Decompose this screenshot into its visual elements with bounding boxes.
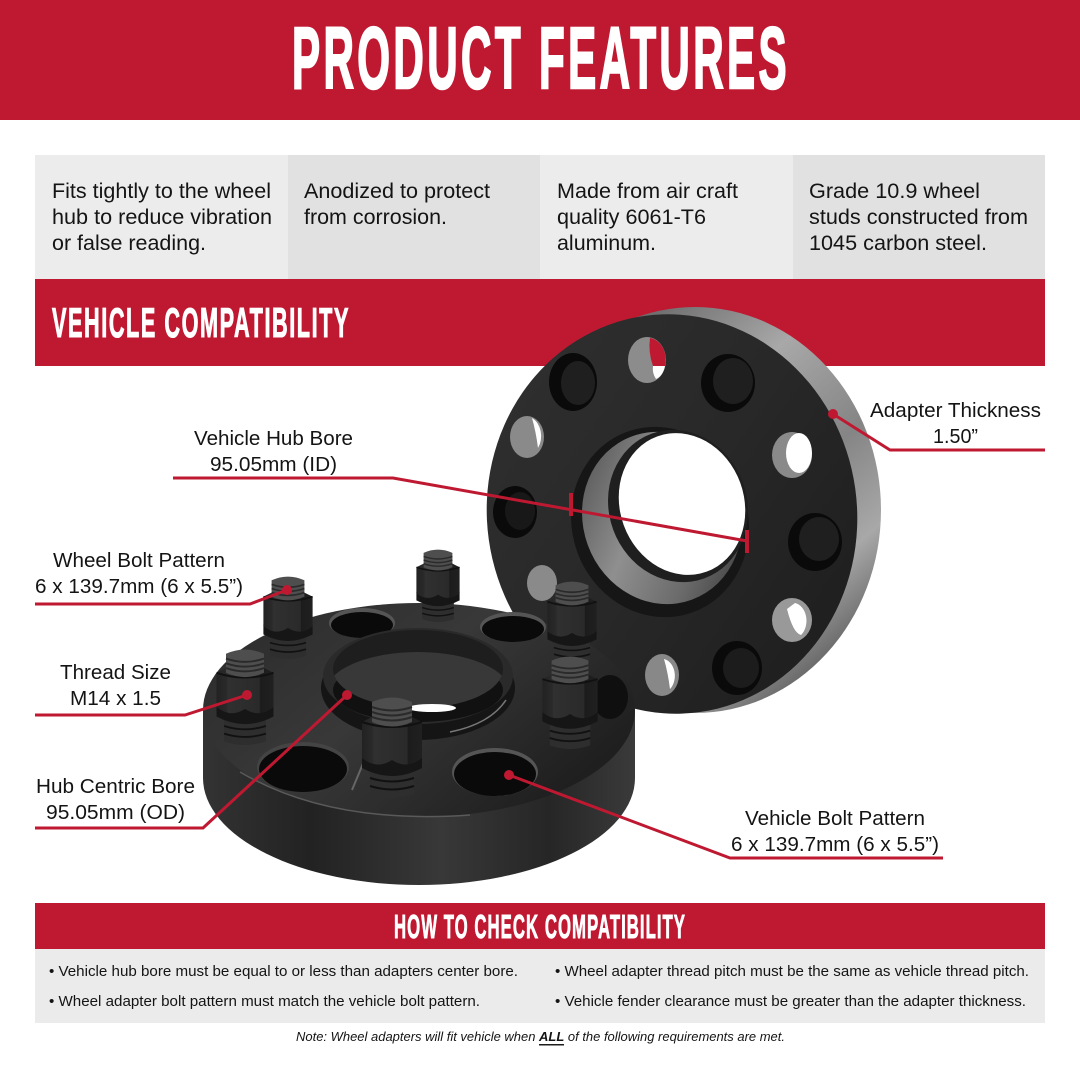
vehicle compatibility band: VEHICLE COMPATIBILITY bbox=[52, 299, 350, 346]
panel: feature cards: Made from air craft bbox=[557, 180, 738, 203]
callout: hub centric bore: Hub Centric Bore bbox=[36, 776, 195, 798]
panel: feature cards: quality 6061-T6 bbox=[557, 206, 706, 229]
panel: feature cards: aluminum. bbox=[557, 232, 656, 255]
panel: feature cards bbox=[35, 155, 1045, 279]
callout: thread size: M14 x 1.5 bbox=[70, 688, 161, 710]
panel: feature cards: Fits tightly to the wheel bbox=[52, 180, 271, 203]
panel: feature cards: hub to reduce vibration bbox=[52, 206, 272, 229]
bolt holes bbox=[257, 608, 628, 796]
panel: feature cards: studs constructed from bbox=[809, 206, 1028, 229]
callout: vehicle hub bore: Vehicle Hub Bore bbox=[194, 428, 353, 450]
raised hub ring bbox=[544, 402, 776, 642]
callout: vehicle bolt pattern: 6 x 139.7mm (6 x 5.5”) bbox=[731, 834, 939, 856]
callout: vehicle bolt pattern: Vehicle Bolt Pattern bbox=[745, 808, 925, 830]
panel: how to check compatibility: • Vehicle hub bore must be equal to or less than adapters center bore. bbox=[49, 964, 518, 980]
panel: feature cards: or false reading. bbox=[52, 232, 206, 255]
callout: wheel bolt pattern: 6 x 139.7mm (6 x 5.5”) bbox=[35, 576, 243, 598]
panel: feature cards: Anodized to protect bbox=[304, 180, 490, 203]
note: Note: Wheel adapters will fit vehicle when ALL of the following requirements are met. bbox=[296, 1030, 785, 1044]
wheel studs bbox=[216, 550, 598, 798]
panel: feature cards: Grade 10.9 wheel bbox=[809, 180, 980, 203]
product photo: flat wheel adapter with studs bbox=[203, 550, 635, 885]
product photo: upright wheel adapter bbox=[461, 290, 883, 738]
title banner bbox=[0, 0, 1080, 120]
adapter body bbox=[203, 603, 635, 885]
panel: how to check compatibility: • Vehicle fender clearance must be greater than the adapter thickness. bbox=[555, 994, 1026, 1010]
callout: vehicle hub bore bbox=[173, 428, 747, 553]
panel: feature cards: from corrosion. bbox=[304, 206, 447, 229]
panel: how to check compatibility: • Wheel adapter bolt pattern must match the vehicle bolt pattern. bbox=[49, 994, 480, 1010]
callout: thread size bbox=[35, 662, 252, 715]
callout: adapter thickness: Adapter Thickness bbox=[870, 400, 1041, 422]
callout: hub centric bore: 95.05mm (OD) bbox=[46, 802, 185, 824]
callout: adapter thickness bbox=[828, 400, 1045, 450]
callout: hub centric bore bbox=[35, 690, 352, 828]
callout: vehicle bolt pattern bbox=[504, 770, 943, 858]
center hub bbox=[321, 628, 515, 740]
panel: how to check compatibility: HOW TO CHECK COMPATIBILITY bbox=[394, 908, 686, 945]
vehicle compatibility band bbox=[35, 279, 1045, 366]
panel: how to check compatibility bbox=[35, 903, 1045, 1023]
open bolt holes bbox=[510, 337, 812, 696]
callout: adapter thickness: 1.50” bbox=[933, 426, 978, 448]
callout: vehicle hub bore: 95.05mm (ID) bbox=[210, 454, 337, 476]
panel: how to check compatibility: • Wheel adapter thread pitch must be the same as vehicle thread pitch. bbox=[555, 964, 1029, 980]
callout: thread size: Thread Size bbox=[60, 662, 171, 684]
panel: feature cards: 1045 carbon steel. bbox=[809, 232, 987, 255]
callout: wheel bolt pattern: Wheel Bolt Pattern bbox=[53, 550, 225, 572]
callout: wheel bolt pattern bbox=[35, 550, 292, 604]
bolt holes with stud heads bbox=[493, 353, 842, 695]
